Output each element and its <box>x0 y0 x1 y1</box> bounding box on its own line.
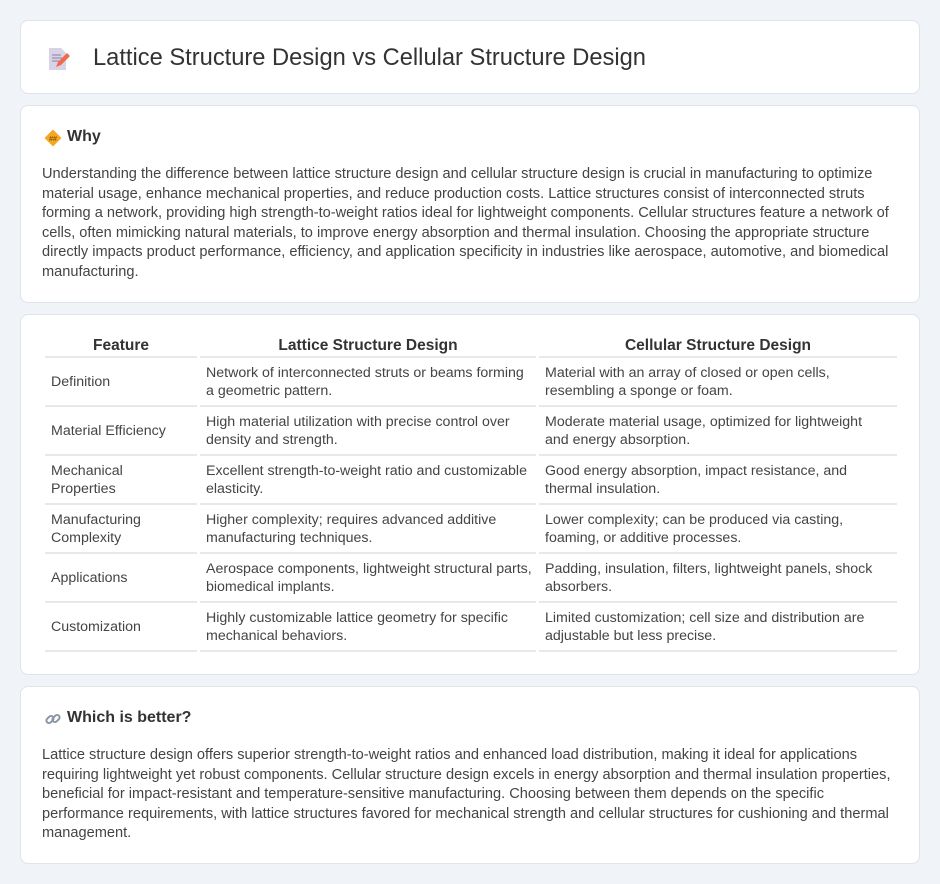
text block: Understanding the difference between lattice structure design and cellular structure design is crucial in manufacturing to optimize material usage, enhance mechanical properties, and reduce production costs. Lattice structures consist of interconnected struts forming a network, providing high strength-to-weight ratios ideal for lightweight components. Cellular structures feature a network of cells, often mimicking natural materials, to improve energy absorption and thermal insulation. Choosing the appropriate structure directly impacts product performance, efficiency, and application specificity in industries like aerospace, automotive, and biomedical manufacturing. <box>42 166 889 280</box>
table: Highly customizable lattice geometry for specific mechanical behaviors. <box>206 610 508 644</box>
table: Feature <box>93 337 149 354</box>
table: Excellent strength-to-weight ratio and customizable elasticity. <box>206 462 527 496</box>
table: Lattice Structure Design <box>278 337 458 354</box>
table: Good energy absorption, impact resistance, and thermal insulation. <box>545 462 847 496</box>
header card <box>20 20 920 94</box>
table: Limited customization; cell size and distribution are adjustable but less precise. <box>545 610 864 644</box>
panel: which is better <box>20 686 920 864</box>
table: Properties <box>51 480 116 496</box>
title: Lattice Structure Design vs Cellular Structure Design <box>93 45 646 71</box>
table: Higher complexity; requires advanced additive manufacturing techniques. <box>206 512 496 546</box>
table: and energy absorption. <box>545 432 690 448</box>
table: Customization <box>51 618 141 634</box>
table: Cellular Structure Design <box>625 337 811 354</box>
icon: link <box>45 714 60 724</box>
panel: why <box>20 105 920 303</box>
table: Complexity <box>51 530 121 546</box>
table: Network of interconnected struts or beams forming a geometric pattern. <box>206 364 524 398</box>
table: Moderate material usage, optimized for lightweight <box>545 414 862 430</box>
table: Aerospace components, lightweight structural parts, biomedical implants. <box>206 560 532 594</box>
table: Manufacturing <box>51 512 141 528</box>
text block: Lattice structure design offers superior strength-to-weight ratios and enhanced load distribution, making it ideal for applications requiring lightweight yet robust components. Cellular structure design excels in energy absorption and thermal insulation properties, beneficial for impact-resistant and temperature-sensitive manufacturing. Choosing between them depends on the specific performance requirements, with lattice structures favored for mechanical strength and cellular structures for cushioning and thermal management. <box>42 747 891 841</box>
table: Padding, insulation, filters, lightweight panels, shock absorbers. <box>545 560 872 594</box>
table: Mechanical <box>51 462 123 478</box>
table: High material utilization with precise control over density and strength. <box>206 414 510 448</box>
panel: comparison table <box>20 314 920 675</box>
table: Material Efficiency <box>51 422 166 438</box>
icon: diamond <box>44 130 62 146</box>
table: Applications <box>51 570 128 586</box>
heading: Which is better? <box>67 709 191 726</box>
table <box>45 337 897 652</box>
heading: Why <box>67 128 101 145</box>
table: Definition <box>51 374 110 390</box>
icon: diamond: ## <box>49 136 57 143</box>
table: Lower complexity; can be produced via casting, foaming, or additive processes. <box>545 512 843 546</box>
table: Material with an array of closed or open cells, resembling a sponge or foam. <box>545 364 830 398</box>
icon: document with pencil <box>49 48 70 70</box>
